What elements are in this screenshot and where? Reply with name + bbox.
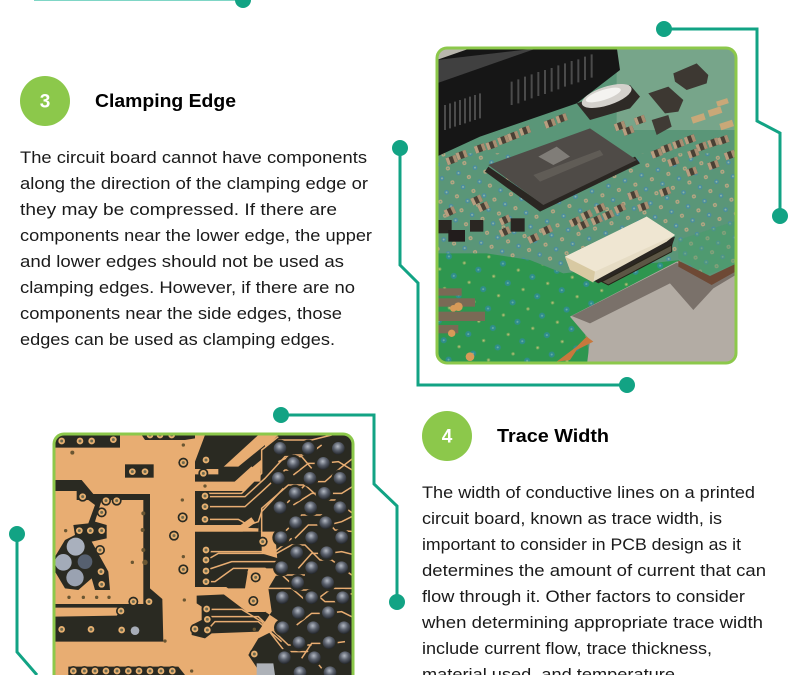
body text: clamping edge: clamping edges. However, if there are no: [20, 279, 355, 297]
heading: Clamping Edge: Clamping Edge: [95, 90, 236, 111]
crystal: [577, 85, 640, 120]
photo: green circuit board with chip and connector: [430, 40, 745, 370]
connector: right of copper board photo: [273, 407, 405, 610]
number badge 4: 4: [442, 426, 453, 448]
number badge 3: 3: [40, 92, 50, 112]
section 3: clamping edge: [20, 76, 373, 349]
body text: trace width: determines the amount of current that can: [422, 562, 766, 580]
main QFP chip: [485, 128, 640, 212]
body text: clamping edge: components near the side edges, those: [20, 305, 342, 323]
body text: trace width: include current flow, trace thickness,: [422, 640, 712, 658]
body text: trace width: flow through it. Other factors to consider: [422, 588, 746, 606]
body text: trace width: when determining appropriate trace width: [421, 614, 763, 632]
small ICs: [673, 63, 708, 90]
lower passives: [569, 216, 581, 227]
body text: clamping edge: they may be compressed. If there are: [20, 201, 337, 219]
heading: Trace Width: Trace Width: [497, 425, 609, 446]
pads: [58, 438, 65, 444]
section 4: trace width: [421, 411, 766, 675]
photo: copper circuit board with traces and solder balls: [52, 430, 355, 675]
copper traces: [202, 435, 355, 668]
teal board: [438, 72, 734, 353]
right board wing: [678, 222, 734, 274]
body text: trace width: important to consider in PCB design as it: [422, 536, 742, 554]
connector: left and bottom of circuit board photo: [392, 140, 635, 393]
small dots: [64, 443, 256, 673]
connector: top right of circuit board photo: [656, 21, 788, 224]
connector: left of copper board photo: [9, 526, 37, 675]
bright green board: [437, 253, 680, 367]
body text: clamping edge: components near the lower edge, the upper: [20, 227, 373, 245]
number badge 4: [422, 411, 472, 461]
body text: clamping edge: and lower edges should not be used as: [20, 253, 344, 271]
body text: trace width: circuit board, known as trace width, is: [422, 510, 722, 528]
upper passive rows: [445, 155, 458, 165]
body text: trace width: [421, 484, 766, 675]
dark header block: [437, 47, 620, 157]
silver cluster: [67, 538, 85, 556]
body text: clamping edge: along the direction of the clamping edge or: [20, 175, 369, 193]
solder balls: [274, 440, 286, 454]
bottom-left parts: [438, 288, 485, 333]
body text: trace width: The width of conductive lines on a printed: [422, 484, 755, 502]
gold pads: [691, 98, 734, 130]
cutout surface and shadow: [570, 262, 738, 367]
connector: top line from previous section: [34, 0, 251, 8]
number badge 3: [20, 76, 70, 126]
white FPC connector: [565, 217, 675, 285]
body text: clamping edge: [20, 149, 373, 349]
body text: clamping edge: The circuit board cannot have components: [20, 149, 367, 167]
body text: clamping edge: edges can be used as clamping edges.: [20, 331, 335, 349]
